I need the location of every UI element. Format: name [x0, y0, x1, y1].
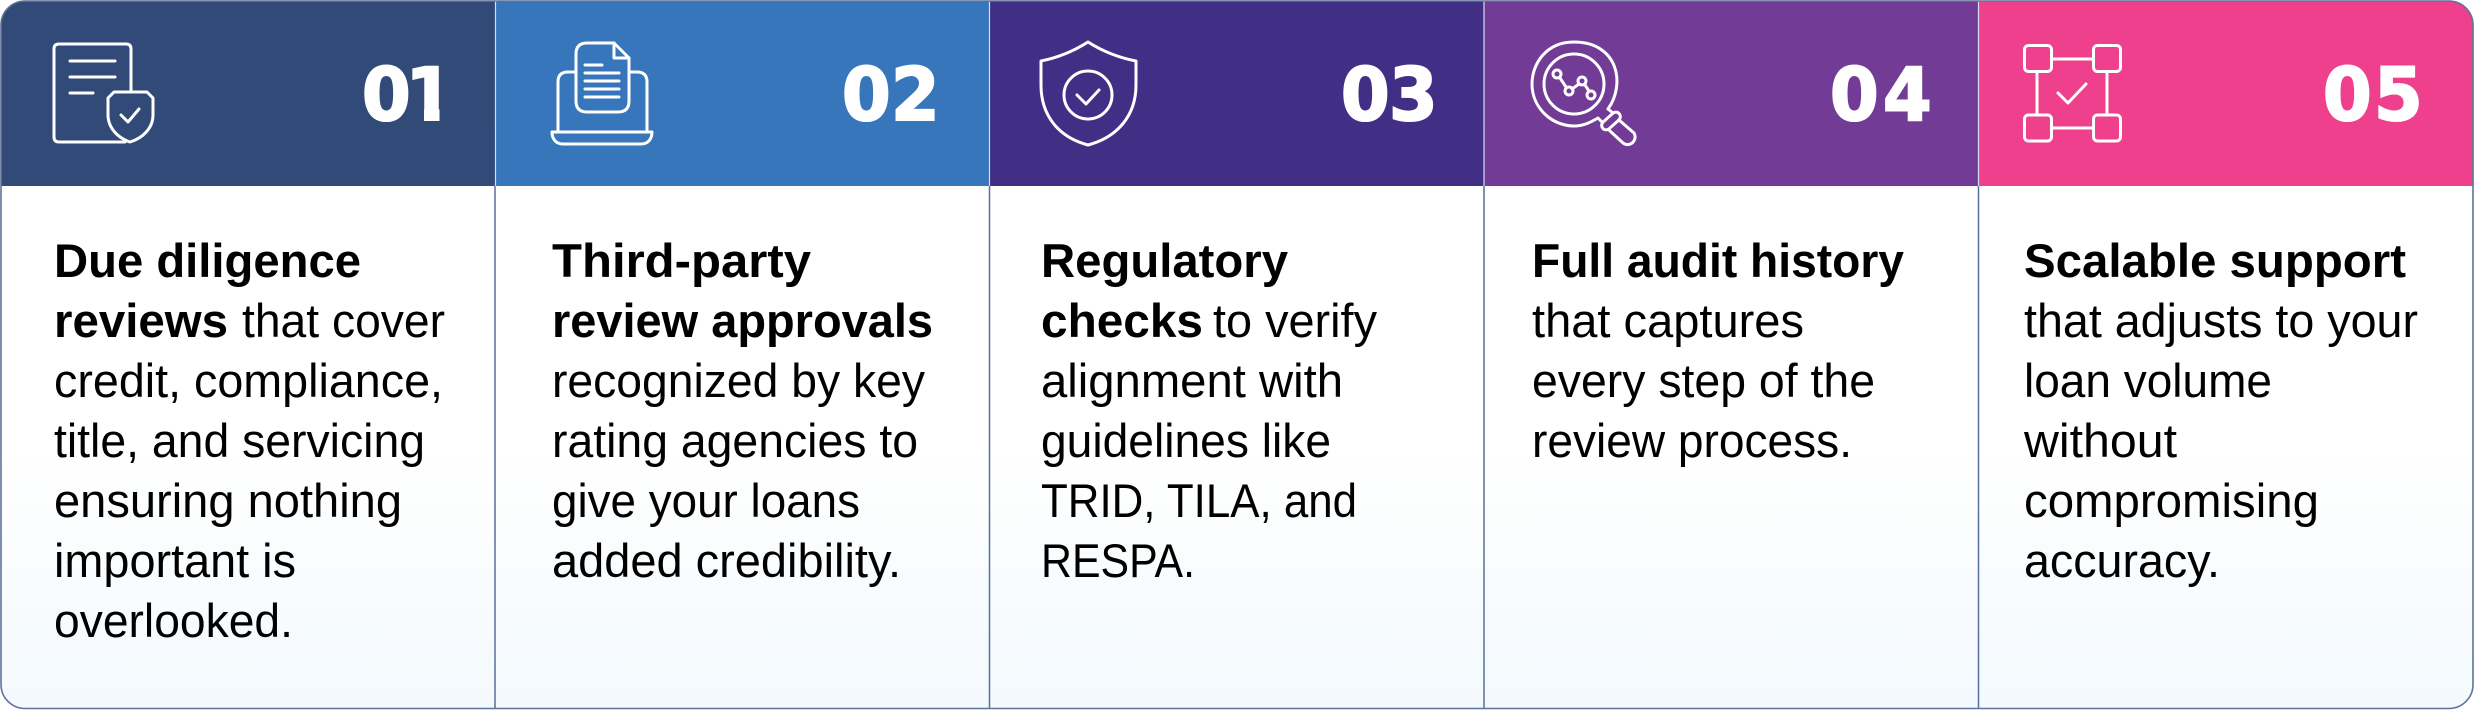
- text: due diligence reviews: reviews: [54, 294, 228, 347]
- text: full audit history: Full audit history: [1532, 234, 1904, 287]
- panel: step 04: [1532, 42, 1932, 467]
- text: third-party review approvals: added credibility.: [552, 534, 901, 587]
- text: scalable support: Scalable support: [2024, 234, 2406, 287]
- text: due diligence reviews: ensuring nothing: [54, 474, 402, 527]
- icon: magnifier with line graph: [1532, 42, 1635, 145]
- text: due diligence reviews: [54, 234, 445, 647]
- number 02: 0: [842, 53, 891, 137]
- text: scalable support: accuracy.: [2024, 534, 2220, 587]
- text: regulatory checks: [1041, 234, 1377, 587]
- panel: step 01: [54, 44, 454, 647]
- number 01: 1: [406, 53, 454, 137]
- text: third-party review approvals: Third-party: [552, 234, 811, 287]
- number 03: [1341, 53, 1438, 137]
- number 05: 5: [2374, 53, 2423, 137]
- number 03: 0: [1341, 53, 1390, 137]
- text: full audit history: that captures: [1532, 294, 1804, 347]
- text: due diligence reviews: important is: [54, 534, 296, 587]
- text: due diligence reviews: Due diligence: [54, 234, 361, 287]
- text: regulatory checks: to verify: [1213, 294, 1377, 347]
- icon: document with shield: [54, 44, 153, 142]
- text: regulatory checks: checks: [1041, 294, 1203, 347]
- number 01: [364, 64, 440, 122]
- icon: connected squares with check: [2024, 46, 2120, 141]
- icon: laptop with document: [552, 43, 652, 144]
- text: full audit history: [1532, 234, 1904, 467]
- text: regulatory checks: alignment with: [1041, 354, 1343, 407]
- text: scalable support: that adjusts to your: [2024, 294, 2418, 347]
- number 04: 4: [1883, 53, 1932, 137]
- text: regulatory checks: Regulatory: [1041, 234, 1288, 287]
- number 04: 0: [1830, 53, 1879, 137]
- number 02: [842, 53, 940, 137]
- text: regulatory checks: TRID, TILA, and: [1041, 474, 1357, 527]
- text: scalable support: [2023, 234, 2418, 587]
- text: regulatory checks: guidelines like: [1041, 414, 1331, 467]
- text: scalable support: loan volume: [2024, 354, 2272, 407]
- text: due diligence reviews: overlooked.: [54, 594, 293, 647]
- text: regulatory checks: RESPA.: [1041, 534, 1195, 587]
- text: due diligence reviews: credit, compliance,: [54, 354, 443, 407]
- text: due diligence reviews: that cover: [242, 294, 445, 347]
- text: third-party review approvals: [552, 234, 933, 587]
- text: full audit history: review process.: [1532, 414, 1852, 467]
- number 04: [1830, 53, 1932, 137]
- text: scalable support: without: [2023, 414, 2177, 467]
- number 01: 0: [362, 53, 411, 137]
- panel: step 05: [2023, 46, 2423, 587]
- number 02: 2: [891, 53, 940, 137]
- panel: step 03: [1041, 42, 1438, 587]
- text: third-party review approvals: review approvals: [552, 294, 933, 347]
- panel: step 02: [552, 43, 940, 587]
- text: third-party review approvals: rating agencies to: [552, 414, 918, 467]
- number 05: 0: [2323, 53, 2372, 137]
- text: third-party review approvals: give your loans: [552, 474, 860, 527]
- number 05: [2323, 53, 2423, 137]
- text: full audit history: every step of the: [1532, 354, 1875, 407]
- text: scalable support: compromising: [2024, 474, 2319, 527]
- number 03: 3: [1389, 53, 1438, 137]
- text: third-party review approvals: recognized by key: [552, 354, 925, 407]
- text: due diligence reviews: title, and servicing: [54, 414, 425, 467]
- icon: shield with check: [1041, 42, 1136, 145]
